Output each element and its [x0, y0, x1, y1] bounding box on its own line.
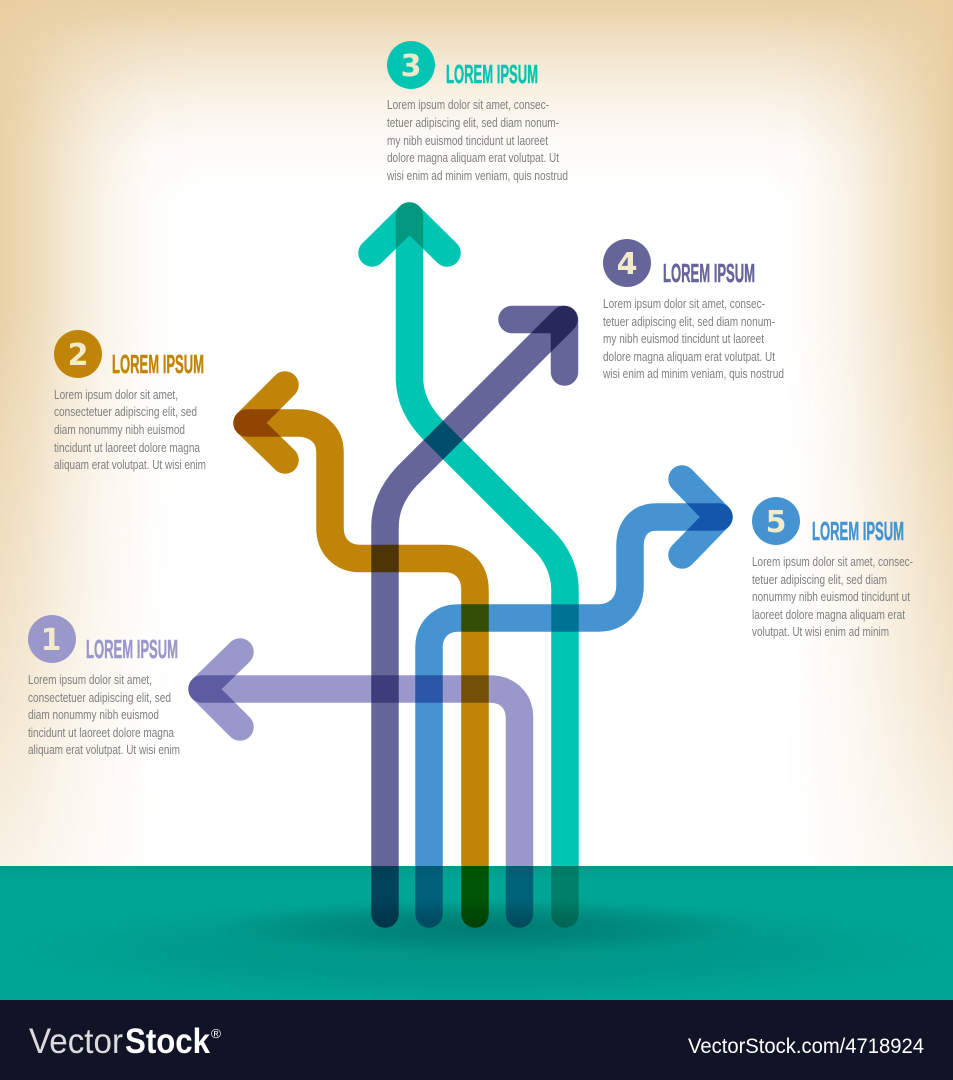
- body 3: my nibh euismod tincidunt ut laoreet: [387, 134, 548, 148]
- body 5: nonummy nibh euismod tincidunt ut: [752, 590, 910, 604]
- footer logo: ®: [211, 1026, 221, 1041]
- heading 1: LOREM IPSUM: [86, 634, 178, 664]
- block 1: lorem ipsum text: [28, 615, 180, 757]
- body 1: diam nonummy nibh euismod: [28, 708, 159, 722]
- body 3: dolore magna aliquam erat volutpat. Ut: [387, 151, 559, 165]
- body 4: wisi enim ad minim veniam, quis nostrud: [602, 367, 784, 381]
- teal ground band with shadow: [0, 866, 953, 1002]
- badge 2: [54, 330, 102, 378]
- body 4: [602, 297, 784, 381]
- block 5: lorem ipsum text: [752, 497, 913, 639]
- body 2: Lorem ipsum dolor sit amet,: [54, 388, 178, 402]
- badge 2: 2: [68, 338, 88, 373]
- footer logo: Vector: [29, 1022, 123, 1061]
- arrow 3: teal, pointing up: [372, 216, 565, 914]
- footer logo: [29, 1022, 221, 1061]
- body 2: diam nonummy nibh euismod: [54, 423, 185, 437]
- body 5: volutpat. Ut wisi enim ad minim: [752, 625, 889, 639]
- body 4: dolore magna aliquam erat volutpat. Ut: [603, 350, 775, 364]
- badge 1: 1: [41, 623, 61, 658]
- heading 3: LOREM IPSUM: [446, 59, 538, 89]
- body 1: aliquam erat volutpat. Ut wisi enim: [28, 743, 180, 757]
- heading 2: LOREM IPSUM: [112, 349, 204, 379]
- body 4: my nibh euismod tincidunt ut laoreet: [603, 332, 764, 346]
- body 5: Lorem ipsum dolor sit amet, consec-: [752, 555, 913, 569]
- body 2: consectetuer adipiscing elit, sed: [54, 405, 197, 419]
- body 2: tincidunt ut laoreet dolore magna: [54, 441, 200, 455]
- arrow 5: blue, pointing right: [429, 479, 719, 914]
- body 1: Lorem ipsum dolor sit amet,: [28, 673, 152, 687]
- badge 5: [752, 497, 800, 545]
- badge 3: 3: [401, 49, 421, 84]
- body 1: consectetuer adipiscing elit, sed: [28, 691, 171, 705]
- badge 5: 5: [766, 505, 786, 540]
- body 5: laoreet dolore magna aliquam erat: [752, 608, 905, 622]
- footer logo: Stock: [125, 1022, 210, 1061]
- block 3: lorem ipsum text: [386, 41, 568, 183]
- body 3: Lorem ipsum dolor sit amet, consec-: [387, 98, 549, 112]
- body 2: aliquam erat volutpat. Ut wisi enim: [54, 458, 206, 472]
- body 4: Lorem ipsum dolor sit amet, consec-: [603, 297, 765, 311]
- body 1: [28, 673, 180, 757]
- body 3: [386, 98, 568, 183]
- body 4: tetuer adipiscing elit, sed diam nonum-: [603, 315, 775, 329]
- body 3: wisi enim ad minim veniam, quis nostrud: [386, 169, 568, 183]
- arrow 1: light purple, pointing left: [202, 652, 520, 914]
- footer watermark bar: [0, 1000, 953, 1080]
- badge 1: [28, 615, 76, 663]
- body 3: tetuer adipiscing elit, sed diam nonum-: [387, 116, 559, 130]
- arrow 4: indigo, pointing up-right: [385, 320, 564, 914]
- arrow 2: gold, pointing left: [247, 385, 475, 914]
- block 4: lorem ipsum text: [602, 239, 784, 381]
- block 2: lorem ipsum text: [54, 330, 206, 472]
- badge 4: [603, 239, 651, 287]
- badge 4: 4: [617, 247, 637, 282]
- body 5: tetuer adipiscing elit, sed diam: [752, 573, 887, 587]
- footer image id: VectorStock.com/4718924: [688, 1035, 924, 1058]
- body 2: [54, 388, 206, 472]
- body 5: [752, 555, 913, 639]
- body 1: tincidunt ut laoreet dolore magna: [28, 726, 174, 740]
- heading 4: LOREM IPSUM: [663, 258, 755, 288]
- badge 3: [387, 41, 435, 89]
